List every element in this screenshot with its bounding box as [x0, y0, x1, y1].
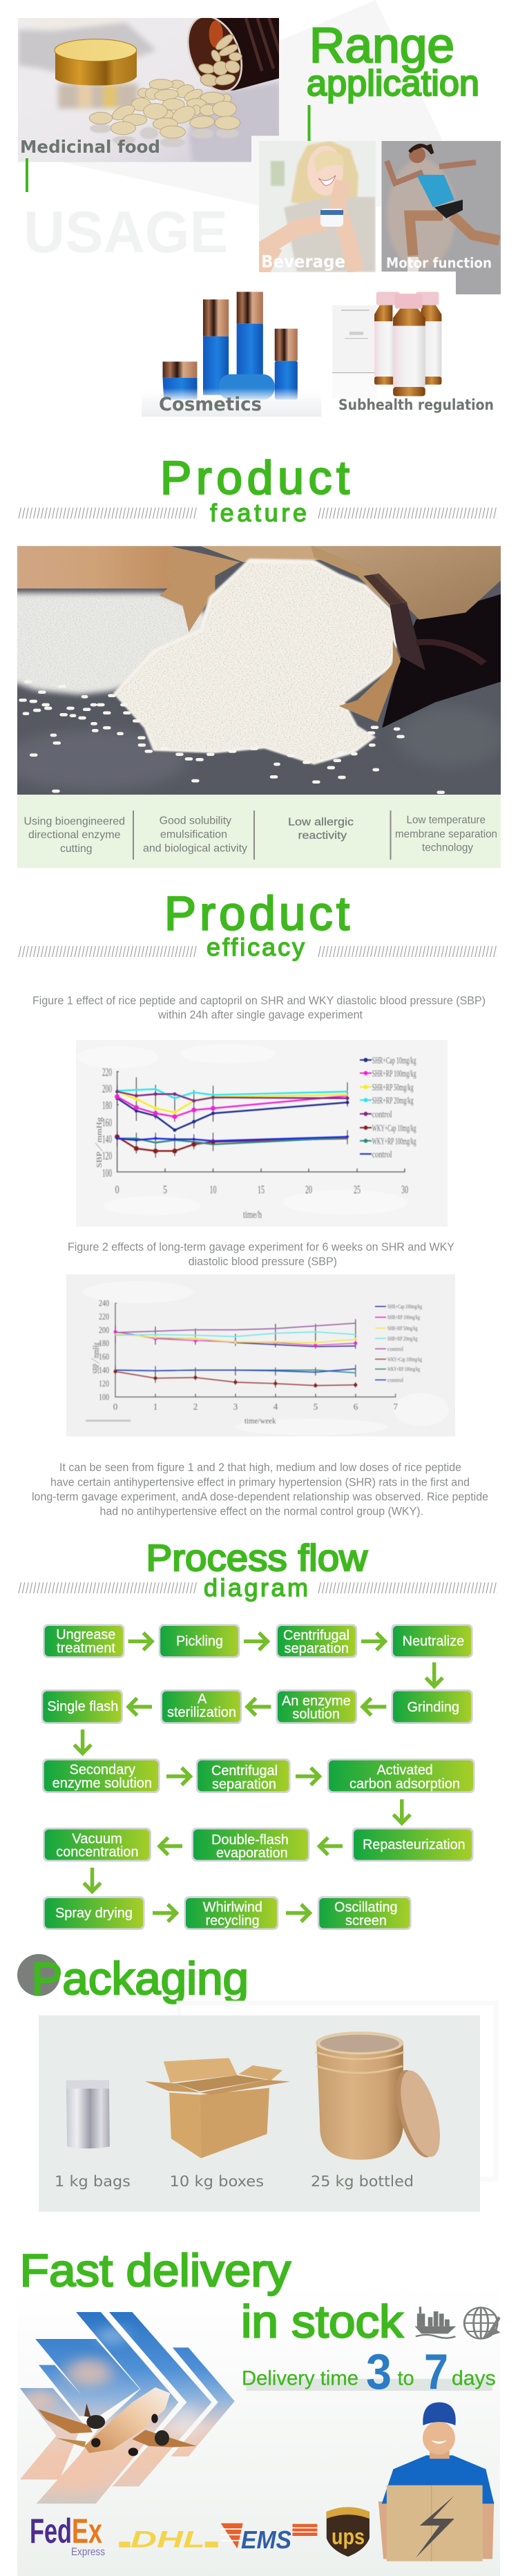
logo: FedEx: Ex	[72, 2512, 102, 2550]
logo: EMS wordmark: EMS	[241, 2526, 291, 2554]
caption: figure 1: Figure 1 effect of rice peptide and captopril on SHR and WKY diastolic blood pressure (SBP)	[32, 994, 486, 1007]
step: A sterilization: sterilization	[167, 1705, 236, 1720]
legend: SHR+RP 20mg/kg	[372, 1096, 414, 1106]
x axis title: time/h	[243, 1209, 262, 1220]
step: Grinding: Grinding	[407, 1700, 459, 1715]
step: Oscillating screen: screen	[345, 1913, 387, 1929]
y axis labels: 240	[99, 1298, 109, 1308]
label: 10 kg boxes: 10 kg boxes	[170, 2173, 264, 2190]
x axis labels: 10	[210, 1183, 217, 1196]
heading: Product feature	[18, 452, 497, 527]
step: Centrifugal separation: Centrifugal	[211, 1763, 278, 1779]
arrow	[74, 1730, 91, 1754]
center bottle	[393, 294, 425, 396]
arrow	[247, 1698, 271, 1715]
step: Repasteurization	[352, 1828, 474, 1862]
feature: membrane separation: Low temperature	[406, 815, 486, 826]
caption: figure 2	[68, 1240, 454, 1268]
icon: cardboard box	[145, 2058, 290, 2158]
label: Motor function: Motor function	[386, 254, 492, 271]
legend: control	[387, 1346, 404, 1352]
series: WKY control	[115, 1369, 356, 1372]
delivery time highlight bar	[246, 2379, 492, 2391]
delivery time text: 3	[366, 2345, 392, 2400]
feature: solubility: and biological activity	[143, 842, 247, 854]
logo: DHL wordmark: DHL	[131, 2527, 205, 2553]
background light polygon	[57, 0, 442, 207]
x axis labels: 15	[258, 1183, 265, 1196]
delivery time text: to	[398, 2367, 414, 2390]
sack right	[311, 546, 501, 620]
step: Vacuum concentration: concentration	[56, 1844, 138, 1859]
heading: in stock: in stock	[241, 2295, 404, 2347]
series: SHR+RP 100mg/kg	[117, 1096, 347, 1117]
rice on floor left	[0, 593, 209, 694]
step: Ungrease treatment: treatment	[57, 1640, 115, 1656]
data markers	[117, 1092, 347, 1151]
arrow	[296, 1768, 319, 1785]
x axis labels: 1	[153, 1401, 157, 1412]
delivery time text	[242, 2345, 496, 2400]
shadow under bag	[382, 594, 501, 728]
step: Vacuum concentration: Vacuum	[72, 1831, 122, 1846]
legend: SHR+RP 50mg/kg	[372, 1083, 414, 1093]
paragraph: findings summary: have certain antihypertensive effect in primary hypertension (SHR) rats in the first and	[50, 1476, 470, 1489]
step: Spray drying	[43, 1896, 145, 1930]
legend: control	[372, 1110, 392, 1120]
step: Pickling	[159, 1624, 240, 1658]
sack left flap	[160, 546, 240, 632]
x axis labels: 0	[113, 1401, 117, 1412]
image: airplane in chevrons	[17, 2310, 241, 2506]
y axis labels	[102, 1066, 112, 1180]
step: Ungrease treatment	[43, 1624, 124, 1658]
step: An enzyme solution: solution	[292, 1707, 340, 1722]
step: Centrifugal separation: separation	[212, 1777, 276, 1792]
step: Repasteurization: Repasteurization	[363, 1837, 466, 1853]
x axis labels: 2	[193, 1401, 198, 1412]
x axis labels	[115, 1183, 408, 1196]
heading: Range application: Range	[309, 19, 454, 73]
y axis labels: 120	[102, 1149, 112, 1162]
heading: Product feature: feature	[210, 499, 307, 527]
photo: cosmetics	[142, 292, 321, 417]
legend: control	[387, 1377, 404, 1383]
x axis labels: 4	[274, 1401, 278, 1412]
right bottle	[416, 292, 441, 385]
series: WKY+RP	[115, 1370, 356, 1373]
step: Centrifugal separation	[276, 1624, 357, 1658]
y axis labels: 160	[102, 1116, 112, 1129]
x axis labels: 0	[115, 1183, 119, 1196]
step: Single flash	[41, 1689, 123, 1724]
photo: beverage	[259, 141, 376, 272]
step: Single flash: Single flash	[47, 1699, 118, 1714]
label: Cosmetics: Cosmetics	[159, 394, 262, 415]
step: Centrifugal separation: Centrifugal	[283, 1628, 349, 1643]
feature: membrane separation: technology	[422, 842, 473, 853]
caption: figure 2: Figure 2 effects of long-term gavage experiment for 6 weeks on SHR and WKY	[68, 1240, 454, 1253]
arrow	[286, 1904, 309, 1922]
faint frame	[179, 2003, 496, 2179]
paragraph: findings summary	[32, 1461, 488, 1518]
icon: foil bag	[66, 2081, 110, 2148]
series: SHR+RP 50	[115, 1334, 356, 1343]
tablet reflections	[90, 124, 240, 147]
legend: WKY+RP 100mg/kg	[387, 1366, 420, 1372]
x axis labels: 5	[163, 1183, 167, 1196]
feature: enzyme cutting: directional enzyme	[28, 829, 121, 841]
icon: fibre drum and lid	[316, 2032, 448, 2160]
section: delivery	[17, 2244, 500, 2576]
logo: UPS wordmark: ups	[332, 2524, 365, 2549]
left bottle	[374, 292, 400, 385]
x axis labels: 30	[401, 1183, 408, 1196]
legend: control	[372, 1150, 392, 1160]
caption: figure 2: diastolic blood pressure (SBP)	[189, 1255, 337, 1268]
series: WKY control	[117, 1137, 347, 1141]
amber bottle	[216, 18, 280, 91]
feature: membrane separation: membrane separation	[395, 828, 497, 840]
step: Activated carbon adsorption: Activated	[377, 1763, 433, 1778]
series: SHR+Cap	[115, 1332, 356, 1347]
step: Centrifugal separation: separation	[285, 1641, 349, 1656]
caption: figure 1	[32, 994, 486, 1021]
y axis labels: 220	[99, 1311, 109, 1321]
legend: SHR+RP 50mg/kg	[387, 1325, 417, 1332]
heading: Process flow diagram	[18, 1537, 497, 1602]
rope	[390, 603, 425, 670]
illustration: courier with parcel	[378, 2403, 494, 2561]
arrow	[128, 1633, 152, 1650]
delivery time text: days	[452, 2367, 496, 2390]
step: Oscillating screen	[318, 1896, 412, 1930]
icon: cargo ship	[415, 2307, 456, 2338]
arrow	[363, 1698, 386, 1715]
series: SHR+Cap 10mg/kg	[117, 1098, 347, 1130]
legend: WKY+RP 100mg/kg	[372, 1137, 416, 1147]
y axis labels: 100	[102, 1166, 112, 1180]
step: Grinding	[391, 1689, 473, 1724]
step: An enzyme solution	[276, 1689, 357, 1724]
label: Beverage: Beverage	[261, 252, 345, 272]
arrow	[394, 1799, 410, 1823]
logo: FedEx: Express	[71, 2546, 105, 2558]
series: SHR+RP 100	[115, 1332, 356, 1345]
heading icon: circle	[17, 1954, 60, 1996]
arrow	[84, 1868, 101, 1892]
arrow	[128, 1698, 152, 1715]
step: Whirlwind recycling	[184, 1896, 278, 1930]
section: packaging	[17, 1953, 496, 2212]
feature: low allergic reactivity: Low allergic	[288, 817, 354, 828]
legend: SHR+RP 100mg/kg	[387, 1314, 420, 1320]
step: A sterilization: A	[198, 1692, 207, 1707]
feature: solubility	[143, 815, 247, 854]
delivery time text: Delivery time	[242, 2367, 358, 2390]
y axis labels: 220	[102, 1066, 112, 1079]
feature: enzyme cutting: cutting	[60, 843, 93, 855]
paragraph: findings summary: It can be seen from figure 1 and 2 that high, medium and low doses of rice peptide	[59, 1461, 461, 1474]
legend: SHR+RP 100mg/kg	[372, 1069, 416, 1079]
step: Secondary enzyme solution: enzyme solution	[52, 1776, 152, 1791]
label: 1 kg bags: 1 kg bags	[55, 2173, 131, 2190]
step: Secondary enzyme solution	[42, 1759, 160, 1793]
rice pile	[113, 558, 398, 765]
tablets	[89, 79, 240, 138]
logo: FedEx	[30, 2512, 105, 2558]
flowchart: process steps	[41, 1624, 475, 1930]
legend: WKY+Cap 10mg/kg	[372, 1124, 416, 1134]
axes	[115, 1303, 396, 1397]
series: SHR+RP 50mg/kg	[117, 1092, 347, 1112]
section: range of application	[18, 0, 501, 294]
y axis labels: 200	[99, 1325, 109, 1335]
arrow	[244, 1633, 268, 1650]
series: SHR+RP 20mg/kg	[117, 1089, 347, 1098]
heading: Fast delivery: Fast delivery	[20, 2244, 291, 2295]
logo: EMS stripes	[221, 2523, 317, 2548]
step: Spray drying: Spray drying	[55, 1906, 133, 1921]
heading: Process flow diagram: diagram	[204, 1573, 308, 1602]
heading: Range application	[307, 19, 479, 104]
feature: low allergic reactivity: reactivity	[298, 830, 347, 842]
y axis labels: 160	[99, 1352, 109, 1362]
step: Double-flash evaporation: Double-flash	[211, 1832, 289, 1848]
x axis labels: 7	[393, 1401, 398, 1412]
step: Whirlwind recycling: recycling	[206, 1913, 260, 1929]
axes	[117, 1071, 405, 1172]
arrow	[319, 1837, 343, 1855]
step: Activated carbon adsorption	[327, 1759, 475, 1793]
series: WKY+Cap	[115, 1372, 356, 1385]
photo: subhealth regulation	[332, 292, 494, 413]
panel: packaging options	[39, 2016, 480, 2212]
feature: enzyme cutting: Using bioengineered	[23, 815, 125, 827]
legend: SHR+RP 20mg/kg	[387, 1336, 417, 1342]
arrow	[160, 1837, 182, 1855]
logo: UPS shield	[327, 2507, 370, 2557]
heading: Process flow diagram: Process flow	[146, 1537, 368, 1579]
arrow	[166, 1768, 191, 1785]
y axis title: SBP／mmHg	[95, 1117, 104, 1168]
feature: low allergic reactivity	[288, 817, 354, 842]
arrow	[425, 1663, 443, 1686]
heading: Product efficacy: Product	[164, 887, 349, 940]
burlap left	[17, 546, 172, 589]
y axis labels: 180	[99, 1338, 109, 1348]
gold cap	[55, 50, 137, 86]
step: An enzyme solution: An enzyme	[282, 1694, 351, 1709]
burlap weave texture	[160, 546, 501, 722]
x axis labels: 25	[354, 1183, 361, 1196]
y axis labels: 140	[99, 1365, 109, 1375]
label: 25 kg bottled: 25 kg bottled	[311, 2173, 414, 2190]
label: Medicinal food: Medicinal food	[20, 137, 160, 157]
heading: Range application: application	[307, 64, 479, 104]
step: Whirlwind recycling: Whirlwind	[203, 1900, 262, 1915]
chart: figure 1 blood pressure 24h	[76, 1040, 448, 1227]
paragraph: findings summary: long-term gavage experiment, andA dose-dependent relationship was observed. Rice peptide	[32, 1490, 488, 1504]
series: SHR control	[117, 1092, 347, 1101]
step: Neutralize	[391, 1624, 473, 1658]
x axis labels: 3	[233, 1401, 238, 1412]
step: Centrifugal separation	[196, 1759, 291, 1793]
label: Subhealth regulation: Subhealth regulation	[338, 397, 494, 413]
panel: feature list	[17, 795, 501, 868]
sack lower corner	[339, 641, 401, 722]
photo: motor function	[381, 141, 501, 294]
series: WKY+Cap 10mg/kg	[117, 1137, 347, 1151]
legend	[375, 1303, 422, 1383]
step: Pickling: Pickling	[176, 1633, 223, 1649]
heading: Packaging: Packaging	[32, 1953, 249, 2004]
x axis title: time/week	[244, 1416, 276, 1426]
heading: Product feature: Product	[160, 452, 349, 504]
series: WKY+RP 100mg/kg	[117, 1137, 347, 1144]
heading: Product efficacy	[18, 887, 497, 961]
delivery time text: 7	[424, 2345, 448, 2400]
feature: membrane separation	[395, 815, 497, 853]
scattered rice grains	[21, 682, 443, 793]
logo: FedEx: Fed	[30, 2512, 72, 2550]
step: A sterilization	[160, 1689, 242, 1724]
photo: rice sack	[0, 546, 503, 795]
y axis labels: 200	[102, 1082, 112, 1095]
y axis labels: 120	[99, 1378, 109, 1389]
paragraph: findings summary: had no antihypertensive effect on the normal control group (WKY).	[99, 1505, 423, 1518]
step: Activated carbon adsorption: carbon adsorption	[349, 1777, 460, 1792]
feature: solubility: emulsification	[160, 828, 227, 840]
logo: DHL bars	[119, 2541, 218, 2548]
step: Double-flash evaporation	[192, 1828, 309, 1862]
y axis title: SBP／mmHg	[90, 1343, 101, 1374]
legend	[360, 1056, 416, 1160]
step: Oscillating screen: Oscillating	[334, 1900, 398, 1915]
chart: figure 2 blood pressure 6 weeks	[66, 1274, 455, 1437]
feature: enzyme cutting	[23, 815, 125, 855]
step: Double-flash evaporation: evaporation	[216, 1846, 288, 1861]
y axis labels: 140	[102, 1133, 112, 1146]
y axis labels: 180	[102, 1099, 112, 1112]
series: SHR+RP 20	[115, 1332, 356, 1336]
y axis labels: 100	[99, 1392, 109, 1402]
y axis labels	[99, 1298, 109, 1402]
x axis labels: 5	[314, 1401, 318, 1412]
heading: Product efficacy: efficacy	[207, 933, 305, 961]
arrow	[153, 1904, 177, 1922]
accent bar under medicinal food	[26, 158, 28, 192]
feature: solubility: Good solubility	[160, 815, 231, 826]
step: Neutralize: Neutralize	[403, 1633, 464, 1649]
step: Vacuum concentration	[43, 1828, 151, 1862]
x axis labels: 20	[305, 1183, 312, 1196]
watermark: USAGE: USAGE	[23, 200, 228, 265]
legend: SHR+Cap 100mg/kg	[387, 1303, 422, 1310]
photo: medicinal food	[18, 8, 280, 163]
accent bar near heading	[308, 105, 311, 149]
legend: WKY+Cap 100mg/kg	[387, 1356, 422, 1363]
step: Ungrease treatment: Ungrease	[56, 1627, 115, 1642]
step: Secondary enzyme solution: Secondary	[69, 1762, 135, 1777]
panel background	[17, 2282, 500, 2576]
x axis labels: 6	[354, 1401, 358, 1412]
arrow	[361, 1633, 385, 1650]
caption: figure 1: within 24h after single gavage experiment	[157, 1008, 363, 1021]
bottles	[142, 292, 321, 417]
legend: SHR+Cap 10mg/kg	[372, 1056, 416, 1066]
icon: globe with plane	[464, 2307, 499, 2339]
data markers	[115, 1332, 356, 1385]
series: SHR control	[115, 1323, 356, 1332]
x axis labels	[113, 1401, 398, 1412]
